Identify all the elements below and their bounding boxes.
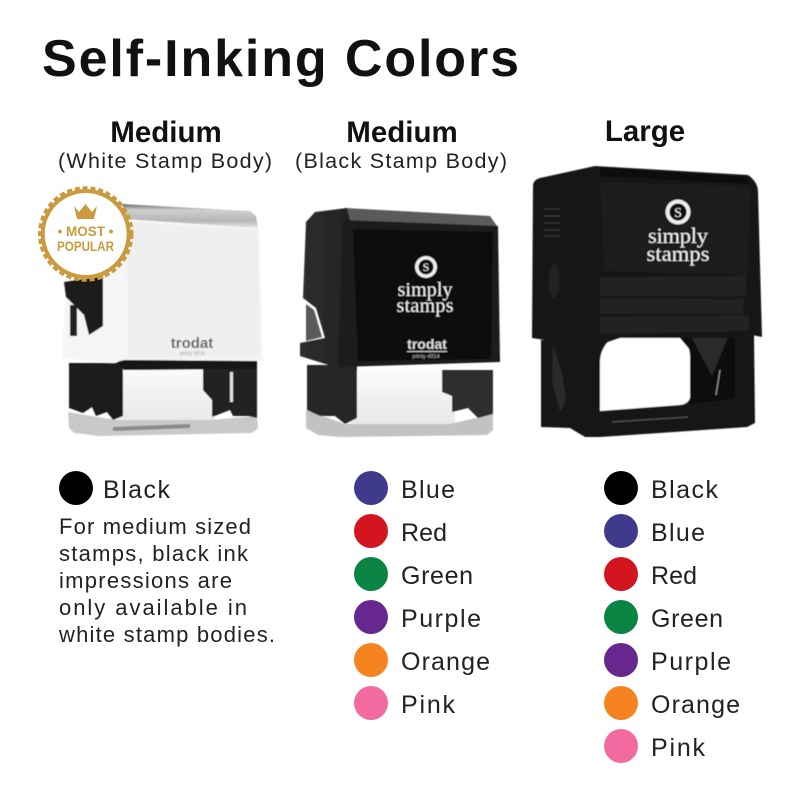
side slot	[70, 305, 77, 336]
label: black: Black	[651, 476, 718, 504]
swatch: green	[354, 557, 388, 591]
crown icon	[74, 204, 97, 219]
clear base	[306, 410, 493, 437]
swatch: blue	[604, 514, 638, 548]
trodat logo: trodat	[407, 336, 447, 352]
frame window	[600, 338, 690, 411]
mechanism clip	[716, 370, 720, 395]
note text: white stamp bodies.	[58, 622, 275, 647]
column heading: medium white: Medium	[110, 116, 222, 149]
ribs	[600, 276, 749, 334]
clear window	[110, 368, 215, 428]
label: pink: Pink	[401, 691, 456, 719]
swatch: black	[604, 471, 638, 505]
column heading: medium black: (Black Stamp Body)	[295, 149, 507, 173]
badge text	[57, 224, 114, 254]
label: purple: Purple	[651, 648, 731, 676]
clear window	[350, 370, 455, 428]
swatch: pink	[354, 686, 388, 720]
trodat logo: printy 4914	[180, 351, 205, 357]
black side grip	[64, 276, 103, 335]
bottom bar highlight	[612, 417, 688, 422]
badge text: POPULAR	[57, 239, 114, 254]
swatch: green	[604, 600, 638, 634]
label: red: Red	[401, 519, 447, 547]
main body	[532, 166, 762, 345]
mechanism triangle	[692, 332, 730, 376]
label: black: Black	[103, 476, 170, 504]
label: blue: Blue	[651, 519, 705, 547]
white medium stamp	[63, 204, 263, 436]
simply stamps logo: simply	[648, 223, 709, 248]
simply stamps logo: stamps	[646, 241, 710, 266]
swatch: orange	[354, 643, 388, 677]
simply stamps logo: S	[423, 260, 429, 274]
glass strip	[122, 204, 258, 228]
most popular badge	[40, 188, 132, 280]
white body	[63, 216, 263, 363]
left legs	[69, 363, 123, 420]
label: orange: Orange	[651, 691, 740, 719]
swatch: red	[354, 514, 388, 548]
badge text: • MOST •	[58, 224, 114, 239]
large black stamp	[532, 166, 762, 437]
ink list: medium white	[58, 471, 275, 647]
trodat logo	[407, 336, 447, 360]
swatch: black	[59, 471, 93, 505]
trodat logo: trodat	[171, 335, 213, 352]
top ridge	[600, 168, 749, 184]
note text	[58, 514, 275, 647]
top strip	[345, 208, 497, 226]
column heading: large: Large	[605, 115, 685, 148]
main body	[338, 220, 500, 367]
label: green: Green	[401, 562, 473, 590]
note text: For medium sized	[59, 514, 251, 539]
right legs	[203, 368, 257, 418]
label: pink: Pink	[651, 734, 706, 762]
swatch: orange	[604, 686, 638, 720]
column heading: medium white: (White Stamp Body)	[58, 149, 272, 173]
black face	[353, 229, 493, 361]
swatch: red	[604, 557, 638, 591]
label: red: Red	[651, 562, 697, 590]
simply stamps logo	[646, 200, 710, 266]
upper black band	[116, 359, 257, 370]
leg highlight	[230, 372, 233, 402]
note text: stamps, black ink	[59, 541, 249, 566]
side oval	[548, 264, 560, 298]
column heading: medium black	[295, 116, 507, 173]
ink list: medium black	[354, 471, 490, 720]
swatch: purple	[354, 600, 388, 634]
side vents	[544, 209, 560, 236]
face panel	[600, 182, 751, 275]
side body	[300, 208, 352, 368]
clear base	[68, 412, 258, 436]
note text: only available in	[59, 595, 247, 620]
swatch: blue	[354, 471, 388, 505]
left legs	[307, 365, 357, 424]
simply stamps logo: stamps	[396, 295, 454, 317]
black medium stamp	[300, 208, 500, 437]
note text: impressions are	[59, 568, 232, 593]
right mechanism	[680, 335, 735, 404]
column heading: medium black: Medium	[346, 116, 458, 149]
title: Self-Inking Colors	[42, 30, 519, 88]
label: blue: Blue	[401, 476, 455, 504]
ink list: large	[604, 471, 740, 763]
swatch: pink	[604, 729, 638, 763]
simply stamps logo: simply	[398, 279, 452, 301]
column heading: medium white	[58, 116, 272, 173]
right legs	[442, 370, 493, 418]
label: purple: Purple	[401, 605, 481, 633]
label: green: Green	[651, 605, 723, 633]
left mechanism	[552, 345, 566, 412]
simply stamps logo: S	[674, 206, 682, 221]
simply stamps logo	[396, 256, 454, 317]
swatch: purple	[604, 643, 638, 677]
trodat logo: printy 4914	[412, 354, 440, 360]
side window	[306, 304, 322, 341]
base shadow line	[113, 424, 190, 431]
front panel	[127, 222, 260, 358]
lower frame	[541, 335, 755, 437]
label: orange: Orange	[401, 648, 490, 676]
